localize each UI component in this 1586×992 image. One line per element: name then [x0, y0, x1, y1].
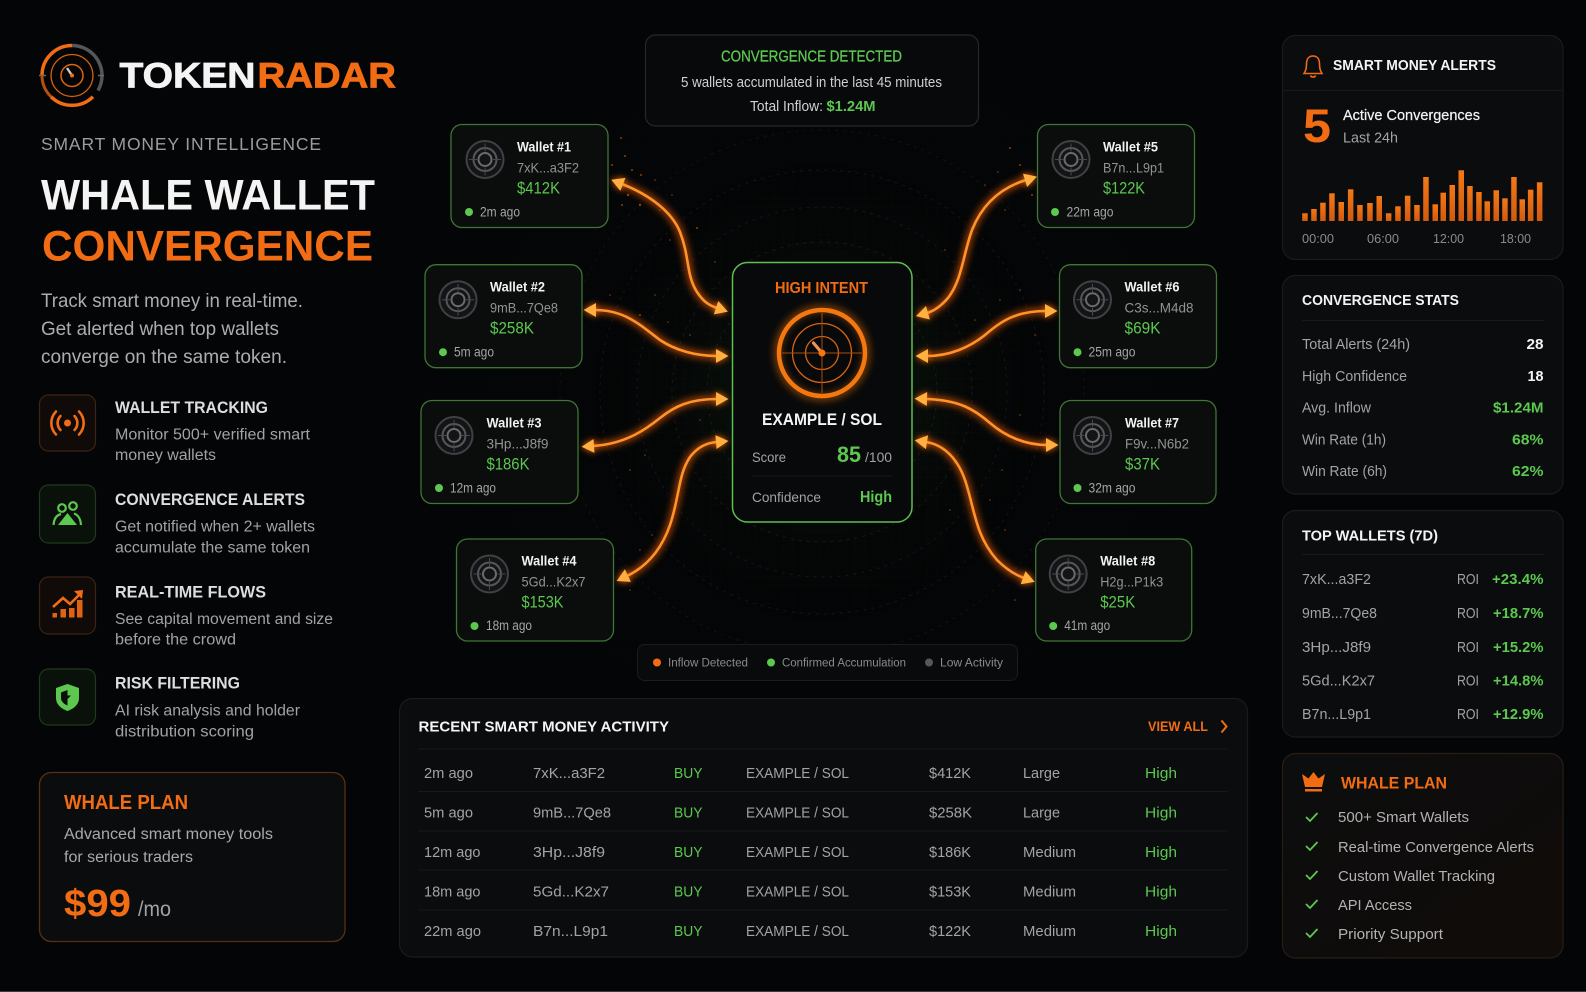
wallet card 5: B7n...L9p1: [1103, 160, 1164, 176]
feature: risk filtering: AI risk analysis and holder: [115, 702, 300, 720]
panel: recent activity table: VIEW ALL: [1148, 719, 1208, 734]
panel: central token card: Score: [752, 449, 786, 465]
panel: top wallets: ROI: [1457, 640, 1479, 656]
icon: crown: [1302, 772, 1325, 792]
table row 5: High: [1145, 924, 1177, 940]
icon: radar gauge: [778, 308, 866, 398]
arrow: wallet 1: [622, 184, 717, 308]
feature: convergence alerts: [40, 485, 315, 556]
feature: real-time flows: before the crowd: [115, 632, 236, 648]
legend: Confirmed Accumulation: [782, 658, 906, 670]
table row 1: 2m ago: [424, 766, 473, 782]
table row 2: High: [1145, 806, 1177, 822]
panel: convergence stats: Win Rate (1h): [1302, 432, 1386, 448]
logo: [39, 45, 396, 105]
brand name: RADAR: [258, 57, 396, 96]
callout: convergence detected: CONVERGENCE DETECTED: [721, 48, 902, 66]
panel: central token card: HIGH INTENT: [775, 280, 868, 297]
table row 4: BUY: [674, 884, 703, 900]
panel: recent activity table: [400, 698, 1248, 957]
panel: convergence stats: Total Alerts (24h): [1302, 337, 1410, 353]
panel: central token card: Confidence: [752, 489, 821, 505]
wallet card 6: [1060, 265, 1216, 368]
panel: whale plan price: Advanced smart money tools: [64, 826, 273, 843]
table row 1: High: [1145, 766, 1177, 782]
title: CONVERGENCE: [42, 222, 373, 270]
legend: Low Activity: [940, 658, 1003, 670]
intro text: Track smart money in real-time.: [41, 290, 303, 312]
panel: top wallets: ROI: [1457, 707, 1479, 723]
table row 4: EXAMPLE / SOL: [746, 884, 849, 900]
panel: top wallets: 9mB...7Qe8: [1302, 606, 1377, 622]
panel: central token card: EXAMPLE / SOL: [762, 411, 882, 429]
panel: top wallets: +12.9%: [1493, 707, 1544, 723]
panel: smart money alerts: Last 24h: [1343, 131, 1398, 147]
panel: convergence stats: 18: [1528, 369, 1544, 385]
arrow: wallet 6: [927, 311, 1046, 356]
panel: top wallets: +15.2%: [1493, 640, 1544, 656]
wallet card 4: 18m ago: [486, 618, 532, 633]
intro text: converge on the same token.: [41, 346, 287, 368]
wallet card 7: [1060, 400, 1216, 504]
table row 1: BUY: [674, 766, 703, 782]
table row 1: $412K: [929, 766, 971, 782]
table row 3: 3Hp...J8f9: [533, 845, 605, 861]
chart axis labels: [1302, 232, 1531, 246]
wallet card 2: $258K: [490, 320, 534, 338]
icon: growth chart: [52, 590, 83, 618]
wallet card 6: Wallet #6: [1124, 280, 1180, 295]
panel: convergence stats: [1282, 276, 1563, 494]
icon: radar logo: [39, 45, 104, 105]
icon: people: [54, 502, 81, 525]
panel: whale plan price: $99: [64, 883, 131, 925]
panel: smart money alerts: SMART MONEY ALERTS: [1333, 58, 1496, 74]
wallet card 4: 5Gd...K2x7: [522, 574, 586, 590]
wallet card 3: [421, 400, 578, 504]
panel: whale plan price: for serious traders: [64, 849, 193, 866]
table row 2: EXAMPLE / SOL: [746, 806, 849, 822]
table row 4: [424, 884, 1177, 900]
panel: whale plan features: WHALE PLAN: [1341, 774, 1447, 792]
table row 4: $153K: [929, 884, 971, 900]
table row 5: $122K: [929, 924, 971, 940]
chart axis labels: 12:00: [1433, 232, 1464, 246]
table row 2: 5m ago: [424, 806, 473, 822]
table row 5: B7n...L9p1: [533, 924, 608, 940]
wallet card 1: $412K: [517, 180, 560, 198]
table row 5: EXAMPLE / SOL: [746, 924, 849, 940]
feature: wallet tracking: WALLET TRACKING: [115, 399, 268, 417]
wallet card 2: 9mB...7Qe8: [490, 300, 558, 316]
panel: convergence stats: CONVERGENCE STATS: [1302, 293, 1459, 309]
feature: wallet tracking: money wallets: [115, 447, 216, 464]
wallet card 7: F9v...N6b2: [1125, 436, 1189, 452]
table row 1: Large: [1023, 766, 1060, 782]
feature: real-time flows: REAL-TIME FLOWS: [115, 584, 266, 602]
table row 5: Medium: [1023, 924, 1076, 940]
arrow glow layer: [593, 180, 1047, 578]
panel: convergence stats: 28: [1526, 337, 1544, 353]
icon: checkmarks: [1306, 813, 1318, 937]
bar chart: [1302, 170, 1542, 221]
table row 1: [424, 766, 1177, 782]
panel: whale plan price: [40, 772, 345, 942]
wallet card 3: Wallet #3: [486, 416, 542, 430]
feature: risk filtering: distribution scoring: [115, 724, 254, 740]
panel: central token card: [732, 262, 912, 522]
panel: top wallets: +14.8%: [1493, 674, 1544, 690]
table row 5: [424, 924, 1177, 940]
table row 4: High: [1145, 884, 1177, 900]
wallet card 6: C3s...M4d8: [1124, 300, 1194, 316]
table row 5: BUY: [674, 924, 703, 940]
table row 4: Medium: [1023, 884, 1076, 900]
wallet card 2: [425, 265, 582, 368]
panel: top wallets: 7xK...a3F2: [1302, 572, 1371, 588]
table row 4: 18m ago: [424, 884, 480, 900]
table row 5: 22m ago: [424, 924, 481, 940]
feature: risk filtering: [40, 669, 300, 740]
panel: convergence stats: High Confidence: [1302, 369, 1407, 385]
table row 4: 5Gd...K2x7: [533, 884, 609, 900]
feature: wallet tracking: [40, 395, 311, 464]
panel: convergence stats: 62%: [1512, 464, 1544, 480]
table row 3: 12m ago: [424, 845, 480, 861]
table row 3: BUY: [674, 845, 703, 861]
title: WHALE WALLET: [41, 172, 375, 220]
eyebrow: SMART MONEY INTELLIGENCE: [41, 134, 321, 154]
brand name: TOKEN: [120, 57, 256, 96]
table row 3: $186K: [929, 845, 971, 861]
wallet card 5: $122K: [1103, 180, 1145, 198]
panel: whale plan price: WHALE PLAN: [64, 791, 188, 814]
panel: whale plan features: [1282, 754, 1563, 958]
table row 2: BUY: [674, 806, 703, 822]
table row 3: Medium: [1023, 845, 1076, 861]
table row 2: $258K: [929, 806, 972, 822]
feature: convergence alerts: CONVERGENCE ALERTS: [115, 491, 305, 509]
title: [41, 172, 375, 270]
wallet card 3: 12m ago: [450, 480, 496, 496]
arrow: wallet 7: [926, 399, 1047, 445]
wallet card 8: H2g...P1k3: [1100, 574, 1163, 590]
arrows: wallet flows: [593, 180, 1047, 578]
wallet card 4: Wallet #4: [522, 554, 577, 568]
brand name: [120, 57, 396, 96]
feature list: API Access: [1338, 898, 1412, 914]
wallet card 6: 25m ago: [1088, 345, 1136, 360]
panel: top wallets: 3Hp...J8f9: [1302, 640, 1371, 656]
wallet card 1: Wallet #1: [517, 140, 571, 154]
wallet card 2: 5m ago: [454, 345, 494, 360]
panel: recent activity table: RECENT SMART MONEY ACTIVITY: [418, 718, 669, 736]
wallet card 2: Wallet #2: [490, 280, 545, 295]
panel: top wallets: +18.7%: [1493, 606, 1544, 622]
table row 2: [424, 806, 1177, 822]
feature list: 500+ Smart Wallets: [1338, 810, 1469, 826]
panel: central token card: 85: [837, 442, 861, 467]
panel: top wallets: ROI: [1457, 572, 1479, 588]
wallet card 4: [456, 539, 614, 641]
wallet card 3: $186K: [486, 456, 530, 474]
feature: wallet tracking: Monitor 500+ verified smart: [115, 426, 311, 444]
feature: real-time flows: See capital movement and size: [115, 611, 333, 628]
wallet card 5: Wallet #5: [1103, 140, 1158, 154]
wallet card 3: 3Hp...J8f9: [486, 436, 549, 452]
arrow: wallet 8: [926, 442, 1024, 578]
table row 3: High: [1145, 845, 1177, 861]
arrow: wallet 2: [595, 310, 717, 356]
panel: convergence stats: Win Rate (6h): [1302, 464, 1387, 480]
panel: central token card: /100: [865, 449, 892, 465]
feature list: Priority Support: [1338, 927, 1443, 943]
panel: smart money alerts: 5: [1303, 99, 1331, 152]
chart axis labels: 00:00: [1302, 232, 1334, 246]
panel: top wallets: ROI: [1457, 674, 1479, 690]
panel: top wallets: TOP WALLETS (7D): [1302, 529, 1438, 545]
intro text: Get alerted when top wallets: [41, 318, 279, 340]
panel: convergence stats: Avg. Inflow: [1302, 401, 1372, 417]
legend: Inflow Detected: [668, 658, 748, 670]
panel: central token card: High: [860, 489, 892, 506]
feature list: Custom Wallet Tracking: [1338, 869, 1495, 885]
panel: convergence stats: 68%: [1512, 432, 1544, 448]
arrow: wallet 5: [927, 180, 1026, 313]
intro text: [41, 290, 303, 368]
table row 2: 9mB...7Qe8: [533, 806, 611, 822]
chart axis labels: 18:00: [1500, 232, 1531, 246]
wallet card 4: $153K: [522, 594, 564, 612]
icon: bell: [1304, 56, 1322, 77]
particles: [609, 137, 1036, 601]
wallet card 5: 22m ago: [1066, 204, 1114, 220]
feature: convergence alerts: Get notified when 2+ wallets: [115, 518, 315, 536]
table row 2: Large: [1023, 806, 1060, 822]
wallet card 7: Wallet #7: [1125, 416, 1179, 430]
wallet card 5: [1038, 124, 1194, 228]
feature list: [1338, 810, 1534, 943]
arrow: wallet 4: [627, 442, 717, 576]
wallet card 6: $69K: [1124, 320, 1160, 338]
legend: [638, 644, 1018, 680]
feature: risk filtering: RISK FILTERING: [115, 674, 240, 692]
feature list: Real-time Convergence Alerts: [1338, 840, 1534, 856]
wallet card 8: 41m ago: [1064, 618, 1110, 633]
panel: top wallets: 5Gd...K2x7: [1302, 674, 1375, 690]
chart axis labels: 06:00: [1367, 232, 1399, 246]
callout: convergence detected: Total Inflow:: [750, 99, 823, 115]
icon: chevron: [1222, 720, 1226, 732]
panel: top wallets: ROI: [1457, 606, 1479, 622]
table row 1: EXAMPLE / SOL: [746, 766, 849, 782]
panel: convergence stats: $1.24M: [1493, 401, 1544, 417]
callout: convergence detected: $1.24M: [826, 99, 876, 115]
icon: broadcast: [51, 412, 84, 434]
panel: smart money alerts: [1282, 36, 1563, 260]
wallet card 1: 7xK...a3F2: [517, 160, 579, 176]
table row 3: EXAMPLE / SOL: [746, 845, 849, 861]
wallet card 7: 32m ago: [1088, 480, 1136, 496]
panel: top wallets: [1282, 510, 1563, 737]
table row 3: [424, 845, 1177, 861]
callout: convergence detected: [646, 35, 978, 126]
wallet card 8: Wallet #8: [1100, 554, 1156, 568]
wallet card 1: 2m ago: [480, 204, 520, 220]
wallet card 7: $37K: [1125, 456, 1160, 474]
arrow: wallet 3: [593, 399, 717, 446]
panel: smart money alerts: Active Convergences: [1343, 108, 1480, 124]
callout: convergence detected: 5 wallets accumulated in the last 45 minutes: [681, 75, 942, 91]
icon: shield: [56, 684, 79, 711]
wallet card 8: $25K: [1100, 594, 1135, 612]
panel: whale plan price: /mo: [138, 898, 171, 921]
feature: real-time flows: [40, 577, 333, 648]
radar backdrop: [560, 130, 1084, 644]
wallet card 1: [451, 124, 608, 228]
table row 1: 7xK...a3F2: [533, 766, 605, 782]
panel: top wallets: +23.4%: [1492, 572, 1544, 588]
feature: convergence alerts: accumulate the same token: [115, 540, 310, 556]
panel: top wallets: B7n...L9p1: [1302, 707, 1371, 723]
wallet card 8: [1036, 539, 1192, 641]
